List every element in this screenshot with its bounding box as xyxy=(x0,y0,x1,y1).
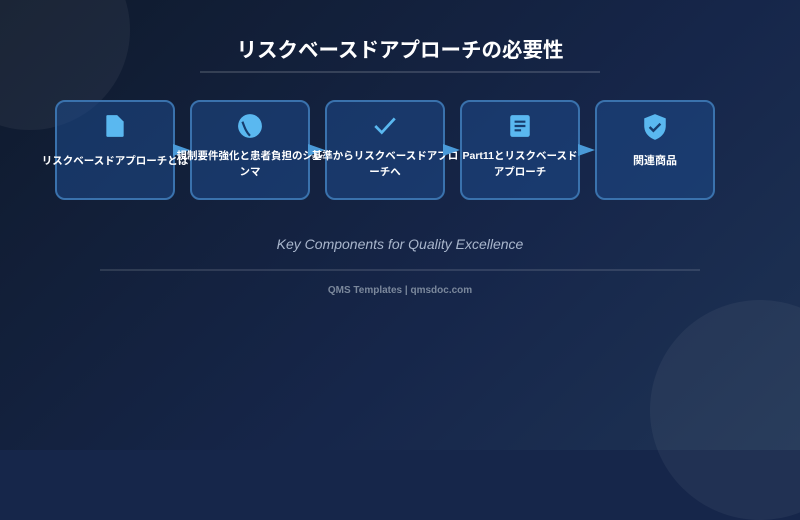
icon: document xyxy=(106,115,124,137)
subtitle: Key Components for Quality Excellence xyxy=(277,236,523,252)
footer: QMS Templates | qmsdoc.com xyxy=(328,285,472,296)
title: リスクベースドアプローチの必要性 xyxy=(236,39,563,62)
text: step 3 xyxy=(312,150,458,178)
text: step 2: ンマ xyxy=(240,166,260,178)
arrow 3 xyxy=(443,144,460,156)
panel: step 4 xyxy=(460,100,580,200)
icon: check xyxy=(374,118,396,134)
arrow 2 xyxy=(308,144,325,156)
text: step 3: ーチへ xyxy=(369,166,401,178)
panel: step 1 xyxy=(55,100,175,200)
text: step 2 xyxy=(176,150,324,178)
text: step 4: アプローチ xyxy=(494,166,546,178)
arrow 1 xyxy=(173,144,190,156)
icon: list doc xyxy=(510,115,530,137)
icon: shield xyxy=(644,114,666,140)
panel: step 5 xyxy=(595,100,715,200)
text: step 4 xyxy=(462,150,578,178)
text: step 3: 基準からリスクベースドアプロ xyxy=(312,150,458,162)
panel: step 2 xyxy=(190,100,310,200)
arrow 4 xyxy=(578,144,595,156)
icon: leaf circle xyxy=(238,114,262,138)
text: step 1: リスクベースドアプローチとは xyxy=(42,155,188,167)
panel: step 3 xyxy=(325,100,445,200)
text: step 2: 規制要件強化と患者負担のジレ xyxy=(176,150,324,162)
text: step 4: Part11とリスクベースド xyxy=(462,150,578,162)
text: step 5: 関連商品 xyxy=(633,155,677,167)
